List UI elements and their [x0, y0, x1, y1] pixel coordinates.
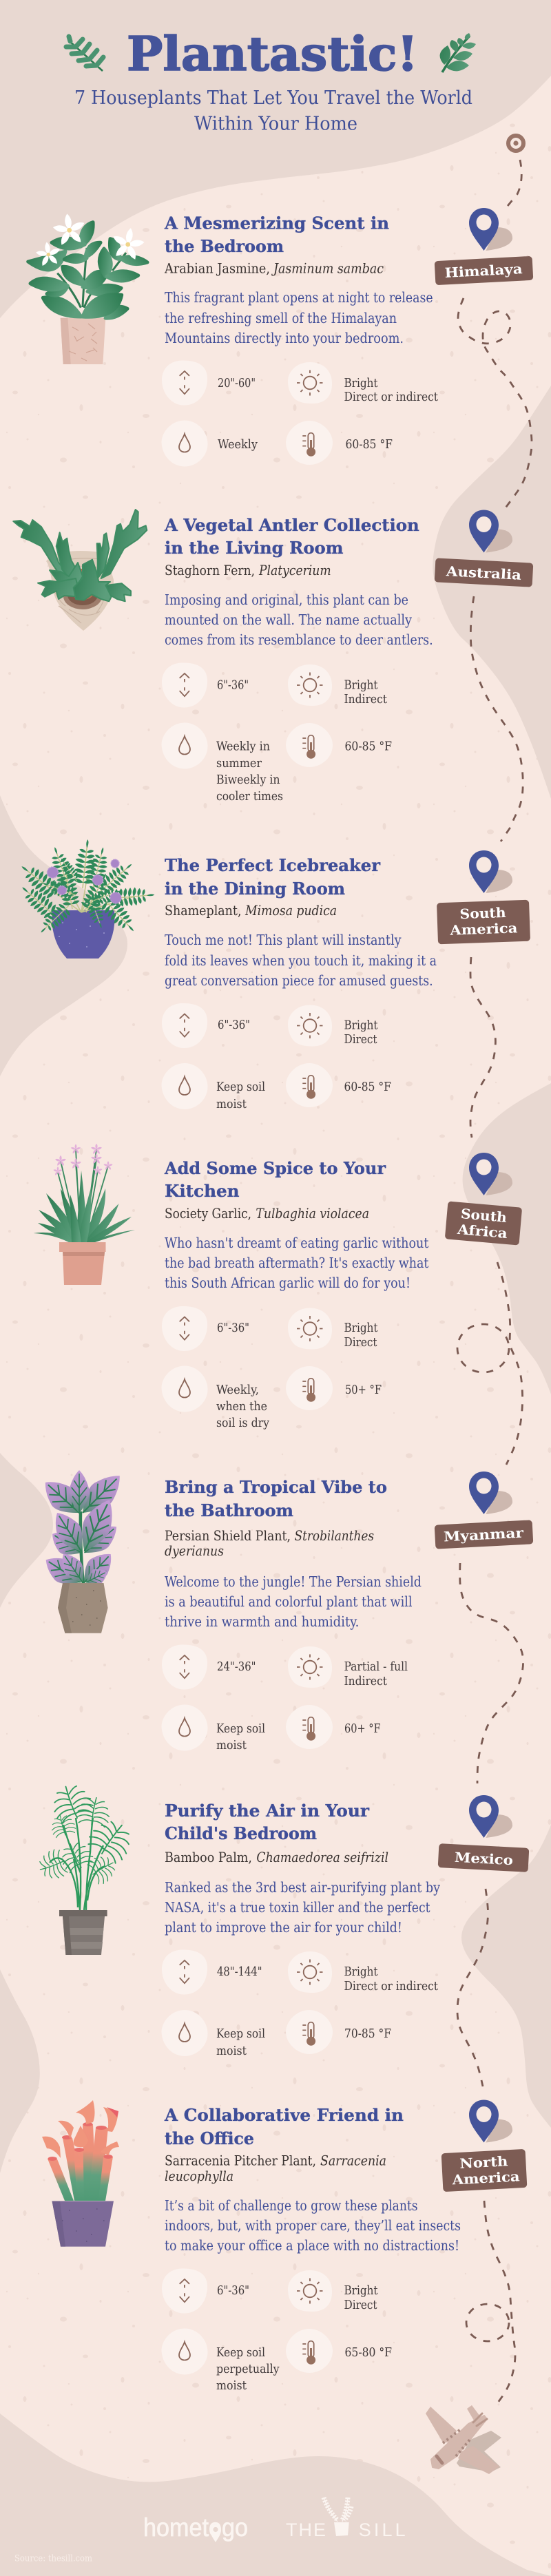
- location tag: North America: America: [451, 2168, 521, 2188]
- location tag: Myanmar: [435, 1520, 533, 1549]
- care: height: 48"-144": [217, 1965, 262, 1979]
- panel: South America shameplant: [16, 838, 530, 1111]
- logo: The Sill: SILL: [359, 2520, 406, 2540]
- plant name: [165, 1205, 369, 1222]
- care: height: [162, 1644, 256, 1690]
- care: light: Bright: [344, 1965, 378, 1979]
- care: light: [288, 1951, 438, 1993]
- description: [165, 591, 433, 648]
- icon: right sprig: [440, 33, 476, 72]
- background blob: left lower: [0, 1969, 40, 2173]
- background blob: header: [0, 0, 551, 318]
- header: [66, 27, 476, 135]
- heading: [165, 1477, 387, 1520]
- care: height: 6"-36": [217, 1321, 249, 1335]
- care: light: [288, 362, 438, 404]
- location tag: Australia: [435, 558, 533, 587]
- heading: [165, 1801, 369, 1843]
- location tag: South Africa: South: [460, 1206, 508, 1226]
- heading: Kitchen: [165, 1181, 240, 1201]
- icon: airplane: [426, 2405, 501, 2474]
- plant: Persian shield: [37, 1467, 129, 1633]
- plant: pitcher plant: [42, 2100, 119, 2247]
- plant name: Staghorn Fern,: [165, 562, 255, 578]
- plant: society garlic: [33, 1144, 135, 1285]
- description: thrive in warmth and humidity.: [165, 1613, 359, 1630]
- care: height: 20"-60": [218, 376, 256, 390]
- care: temperature: [286, 723, 392, 767]
- care: light: [288, 664, 387, 706]
- panel: North America pitcher plant: [42, 2100, 527, 2393]
- care: water: [161, 1366, 270, 1430]
- care: water: Keep soil: [216, 2027, 265, 2041]
- location tag: South America: [437, 900, 530, 944]
- care: height: [162, 1306, 249, 1351]
- plant name: leucophylla: [165, 2168, 233, 2184]
- description: plant to improve the air for your child!: [165, 1919, 402, 1936]
- description: fold its leaves when you touch it, making it a: [165, 952, 437, 969]
- description: This fragrant plant opens at night to release: [165, 289, 433, 306]
- care: water: Keep soil: [216, 1721, 265, 1736]
- plant name: Mimosa pudica: [245, 902, 337, 919]
- plant name: [164, 260, 384, 277]
- care: water: [161, 1705, 265, 1752]
- logo: hometogo: hometogo: [143, 2513, 248, 2542]
- location tag: Himalaya: Himalaya: [444, 261, 523, 281]
- care: water: [161, 723, 283, 804]
- care: light: Indirect: [344, 692, 387, 706]
- care: light: Direct: [344, 2298, 377, 2312]
- location pin: [469, 1472, 512, 1514]
- care: light: [288, 1646, 408, 1688]
- care: temperature: [286, 1063, 391, 1107]
- description: comes from its resemblance to deer antlers.: [165, 631, 433, 648]
- description: Who hasn't dreamt of eating garlic without: [165, 1235, 429, 1251]
- care: water: moist: [216, 2044, 247, 2058]
- description: this South African garlic will do for you!: [165, 1275, 410, 1291]
- subtitle: 7 Houseplants That Let You Travel the World: [74, 87, 472, 109]
- care: light: [288, 1005, 378, 1047]
- source credit: Source: thesill.com: [14, 2553, 92, 2564]
- description: [165, 2197, 461, 2254]
- description: the bad breath aftermath? It's exactly what: [165, 1255, 429, 1271]
- care: light: Bright: [344, 1018, 378, 1033]
- care: temperature: [286, 421, 393, 465]
- plant name: [165, 1849, 388, 1865]
- care: height: [162, 2268, 249, 2314]
- care: temperature: 50+ °F: [345, 1383, 382, 1397]
- description: mounted on the wall. The name actually: [165, 611, 413, 628]
- heading: A Vegetal Antler Collection: [164, 515, 419, 535]
- care: water: summer: [216, 756, 262, 771]
- plant name: Shameplant,: [165, 902, 241, 919]
- care: water: perpetually: [216, 2362, 280, 2376]
- description: [165, 932, 437, 989]
- care: light: Direct or indirect: [344, 390, 438, 404]
- care: water: Weekly in: [216, 740, 270, 753]
- care: water: soil is dry: [216, 1416, 270, 1430]
- care: water: Keep soil: [216, 1080, 265, 1094]
- care: water: cooler times: [216, 789, 283, 804]
- location tag: Mexico: [438, 1843, 529, 1872]
- description: Mountains directly into your bedroom.: [165, 330, 404, 346]
- location pin: [469, 1153, 512, 1195]
- plant name: dyerianus: [165, 1542, 224, 1559]
- care: height: [162, 1003, 250, 1048]
- heading: the Bedroom: [165, 236, 284, 256]
- description: Touch me not! This plant will instantly: [165, 932, 402, 948]
- care: temperature: 60-85 °F: [346, 437, 393, 452]
- care: height: [162, 360, 256, 406]
- location tag: South Africa: [445, 1201, 522, 1246]
- heading: in the Dining Room: [165, 879, 345, 899]
- care: light: Direct: [344, 1032, 377, 1047]
- care: water: Weekly: [218, 437, 258, 452]
- location tag: South Africa: Africa: [456, 1222, 508, 1242]
- care: height: 24"-36": [217, 1659, 256, 1674]
- plant name: Society Garlic,: [165, 1205, 251, 1222]
- location pin: [469, 850, 512, 893]
- care: height: 6"-36": [217, 678, 249, 693]
- care: height: 6"-36": [218, 1018, 250, 1032]
- plant name: [165, 562, 331, 578]
- description: indoors, but, with proper care, they’ll eat insects: [165, 2217, 461, 2234]
- care: height: 6"-36": [217, 2283, 249, 2298]
- care: temperature: [286, 2010, 391, 2054]
- location tag: North America: [441, 2149, 527, 2192]
- location tag: Australia: Australia: [445, 563, 522, 583]
- plant name: [165, 1527, 374, 1559]
- care: temperature: 60-85 °F: [344, 740, 392, 753]
- dashed travel route: [457, 160, 532, 2406]
- description: to make your office a place with no distractions!: [165, 2237, 459, 2254]
- heading: The Perfect Icebreaker: [165, 855, 380, 875]
- care: light: [288, 1308, 378, 1350]
- plant name: [165, 902, 337, 919]
- heading: [164, 213, 389, 256]
- care: water: when the: [216, 1399, 267, 1414]
- location pin: [469, 1795, 512, 1838]
- care: water: [161, 1063, 265, 1111]
- plant name: Chamaedorea seifrizil: [256, 1849, 388, 1865]
- care: water: Weekly,: [216, 1383, 259, 1397]
- plant: staghorn fern: [13, 510, 147, 631]
- description: [165, 289, 433, 346]
- care: temperature: 60-85 °F: [344, 1080, 391, 1094]
- care: light: Indirect: [344, 1674, 387, 1688]
- background blob: right middle: [463, 1083, 551, 1394]
- location pin: [469, 2100, 512, 2143]
- care: height: [162, 662, 249, 708]
- plant: shameplant: [16, 838, 156, 959]
- description: NASA, it's a true toxin killer and the perfect: [165, 1899, 430, 1916]
- plant name: [165, 2153, 386, 2184]
- plant name: Arabian Jasmine,: [164, 260, 270, 277]
- location pin: [469, 510, 512, 552]
- care: light: Partial - full: [344, 1659, 408, 1674]
- heading: [164, 1158, 386, 1201]
- plant name: Platycerium: [258, 562, 331, 578]
- heading: in the Living Room: [165, 538, 343, 558]
- logo: The Sill: [286, 2498, 406, 2540]
- description: Welcome to the jungle! The Persian shield: [165, 1573, 422, 1590]
- care: temperature: 70-85 °F: [344, 2027, 391, 2041]
- plant: bamboo palm: [35, 1780, 138, 1955]
- care: water: moist: [216, 1097, 247, 1111]
- subtitle: Within Your Home: [194, 113, 357, 135]
- plant name: Strobilanthes: [295, 1527, 374, 1544]
- heading: Purify the Air in Your: [165, 1801, 369, 1821]
- heading: Add Some Spice to Your: [164, 1158, 386, 1178]
- plant name: Jasminum sambac: [271, 260, 384, 277]
- background blob: left upper: [0, 795, 127, 1076]
- background blob: right lower: [461, 1825, 551, 2128]
- icon: left sprig: [66, 36, 103, 71]
- care: water: moist: [216, 1738, 247, 1752]
- plant name: Bamboo Palm,: [165, 1849, 252, 1865]
- care: water: Biweekly in: [216, 773, 280, 787]
- location tag: South America: South: [459, 905, 506, 922]
- care: light: Bright: [344, 376, 378, 390]
- icon: route start target: [508, 136, 523, 151]
- description: the refreshing smell of the Himalayan: [165, 310, 397, 326]
- panel: Mexico bamboo palm: [35, 1780, 529, 2058]
- logo: The Sill: THE: [286, 2520, 326, 2540]
- background blob: right upper: [433, 386, 551, 799]
- heading: A Collaborative Friend in: [164, 2105, 404, 2125]
- description: It’s a bit of challenge to grow these plants: [165, 2197, 418, 2214]
- care: light: Bright: [344, 1321, 378, 1335]
- background blob: footer: [0, 2413, 551, 2576]
- care: light: Bright: [344, 2283, 378, 2298]
- heading: [164, 515, 419, 558]
- description: [165, 1573, 422, 1630]
- plant name: Persian Shield Plant,: [165, 1527, 291, 1544]
- plant: Arabian jasmine: [28, 211, 147, 364]
- description: great conversation piece for amused guests.: [165, 972, 433, 989]
- care: light: Direct: [344, 1335, 377, 1350]
- heading: the Bathroom: [165, 1500, 293, 1520]
- panel: Australia staghorn fern: [13, 510, 533, 804]
- care: height: [162, 1949, 262, 1995]
- plant name: Sarracenia: [320, 2153, 386, 2169]
- heading: the Office: [165, 2128, 254, 2148]
- care: light: [288, 2270, 378, 2312]
- description: Imposing and original, this plant can be: [165, 591, 408, 608]
- location tag: Myanmar: Myanmar: [444, 1525, 524, 1545]
- location pin: [469, 208, 512, 251]
- care: light: Bright: [344, 678, 378, 693]
- care: temperature: [286, 2329, 392, 2373]
- description: [165, 1879, 441, 1936]
- heading: Child's Bedroom: [165, 1823, 317, 1843]
- description: [165, 1235, 429, 1291]
- care: water: [161, 420, 258, 467]
- care: light: Direct or indirect: [344, 1979, 438, 1993]
- heading: A Mesmerizing Scent in: [164, 213, 389, 233]
- plant name: Tulbaghia violacea: [256, 1205, 369, 1222]
- care: water: [161, 2010, 265, 2058]
- heading: [164, 2105, 404, 2148]
- description: Ranked as the 3rd best air-purifying plant by: [165, 1879, 441, 1896]
- care: temperature: [286, 1705, 380, 1749]
- panel: Myanmar Persian shield: [37, 1467, 533, 1752]
- location tag: Himalaya: [435, 256, 533, 285]
- care: water: Keep soil: [216, 2345, 265, 2360]
- panel: South Africa society garlic: [33, 1144, 522, 1430]
- background blob: left middle: [0, 1453, 53, 1608]
- plant name: Sarracenia Pitcher Plant,: [165, 2153, 316, 2169]
- care: temperature: 65-80 °F: [344, 2345, 392, 2360]
- panel: Himalaya jasmine: [28, 208, 533, 467]
- location tag: Mexico: Mexico: [454, 1850, 513, 1868]
- care: temperature: 60+ °F: [344, 1721, 380, 1736]
- care: temperature: [286, 1366, 382, 1410]
- care: water: moist: [216, 2378, 247, 2393]
- location tag: South America: America: [449, 920, 518, 939]
- description: is a beautiful and colorful plant that will: [165, 1593, 413, 1610]
- care: water: [161, 2329, 280, 2393]
- subtitle: [74, 87, 472, 135]
- heading: Bring a Tropical Vibe to: [165, 1477, 387, 1497]
- location tag: North America: North: [459, 2153, 508, 2172]
- title: Plantastic!: [127, 27, 418, 82]
- heading: [165, 855, 380, 899]
